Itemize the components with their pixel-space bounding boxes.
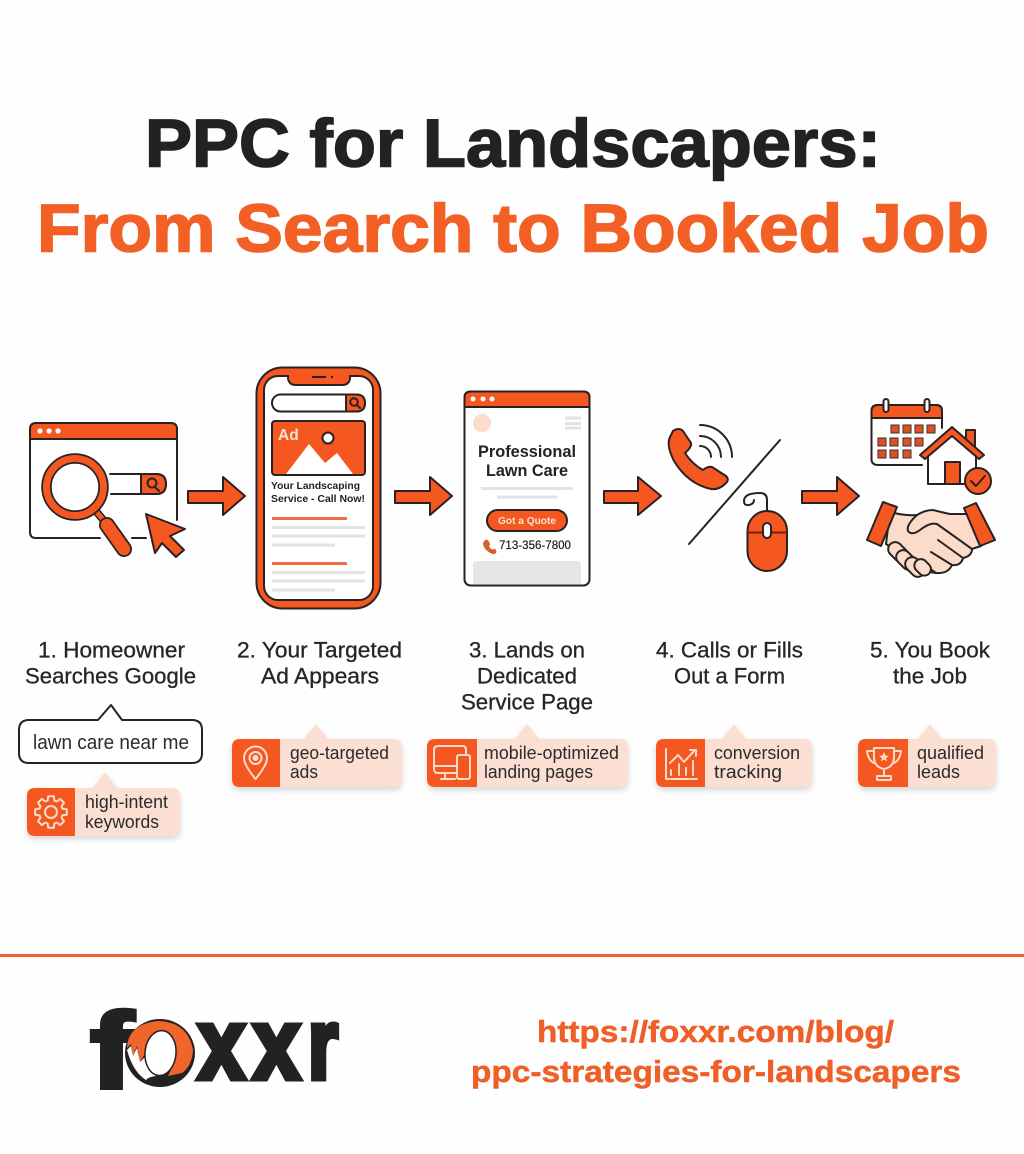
icon: landing page: Lawn Care xyxy=(486,461,568,480)
search query bubble xyxy=(19,705,202,763)
logo: foxxr: x xyxy=(198,988,245,1100)
blog url xyxy=(471,1014,961,1089)
icon: phone with ad xyxy=(256,368,380,608)
tag: qualified leads: qualified xyxy=(917,742,984,763)
icon: landing page xyxy=(464,392,590,586)
tag: high-intent keywords: high-intent xyxy=(85,791,168,812)
search query bubble: lawn care near me xyxy=(33,731,189,754)
icon: phone with ad: Ad xyxy=(278,427,299,444)
tag: conversion tracking: conversion xyxy=(714,742,800,763)
logo: foxxr xyxy=(90,988,338,1111)
title: From Search to Booked Job xyxy=(37,190,989,266)
step 1 label xyxy=(25,638,196,688)
title: PPC for Landscapers: xyxy=(145,106,881,182)
icon: landing page: Professional xyxy=(478,442,576,461)
icon: browser search xyxy=(30,423,185,557)
blog url: ppc-strategies-for-landscapers xyxy=(471,1054,961,1089)
step 2 label: 2. Your Targeted xyxy=(237,638,402,662)
logo: foxxr: r xyxy=(308,988,338,1100)
icon: landing page: Got a Quote xyxy=(498,515,556,527)
icon: growth chart xyxy=(666,749,697,779)
icon: landing page: 713-356-7800 xyxy=(499,540,571,552)
icon: calendar and house xyxy=(872,399,991,494)
step 3 label: 3. Lands on xyxy=(469,638,585,662)
step 3 label: Service Page xyxy=(461,690,593,714)
tag: geo-targeted ads xyxy=(232,724,402,787)
icon: handshake xyxy=(867,502,995,580)
icon: phone with ad: Your Landscaping xyxy=(271,480,360,492)
title xyxy=(37,106,989,266)
tag: geo-targeted ads: ads xyxy=(290,761,318,782)
step 1 label: 1. Homeowner xyxy=(38,638,185,662)
arrow: step 2 to 3 xyxy=(395,477,452,515)
tag: qualified leads xyxy=(858,724,996,787)
tag: mobile-optimized landing pages: mobile-optimized xyxy=(484,742,619,763)
divider xyxy=(0,954,1024,957)
tag: high-intent keywords: keywords xyxy=(85,811,159,832)
logo: foxxr: f xyxy=(90,990,135,1111)
step 2 label xyxy=(237,638,402,688)
tag: conversion tracking xyxy=(656,724,812,787)
step 5 label: 5. You Book xyxy=(870,638,991,662)
step 1 label: Searches Google xyxy=(25,664,196,688)
step 2 label: Ad Appears xyxy=(261,664,379,688)
step 5 label: the Job xyxy=(893,664,967,688)
arrow: step 3 to 4 xyxy=(604,477,661,515)
step 3 label xyxy=(461,638,593,714)
icon: trophy xyxy=(867,748,901,780)
blog url: https://foxxr.com/blog/ xyxy=(537,1014,894,1049)
arrow: step 1 to 2 xyxy=(188,477,245,515)
step 4 label: Out a Form xyxy=(674,664,785,688)
tag: mobile-optimized landing pages: landing pages xyxy=(484,761,593,782)
icon: call or click xyxy=(669,425,787,571)
step 3 label: Dedicated xyxy=(477,664,577,688)
tag: qualified leads: leads xyxy=(917,761,960,782)
step 4 label: 4. Calls or Fills xyxy=(656,638,803,662)
icon: gear xyxy=(35,796,67,828)
logo: foxxr: x xyxy=(253,988,300,1100)
step 4 label xyxy=(656,638,803,688)
tag: geo-targeted ads: geo-targeted xyxy=(290,742,389,763)
tag: conversion tracking: tracking xyxy=(714,761,782,782)
step 5 label xyxy=(870,638,991,688)
icon: map pin xyxy=(244,747,267,779)
icon: devices xyxy=(434,746,470,779)
tag: high-intent keywords xyxy=(27,772,180,836)
icon: phone with ad: Service - Call Now! xyxy=(271,493,365,505)
arrow: step 4 to 5 xyxy=(802,477,859,515)
tag: mobile-optimized landing pages xyxy=(427,724,628,787)
